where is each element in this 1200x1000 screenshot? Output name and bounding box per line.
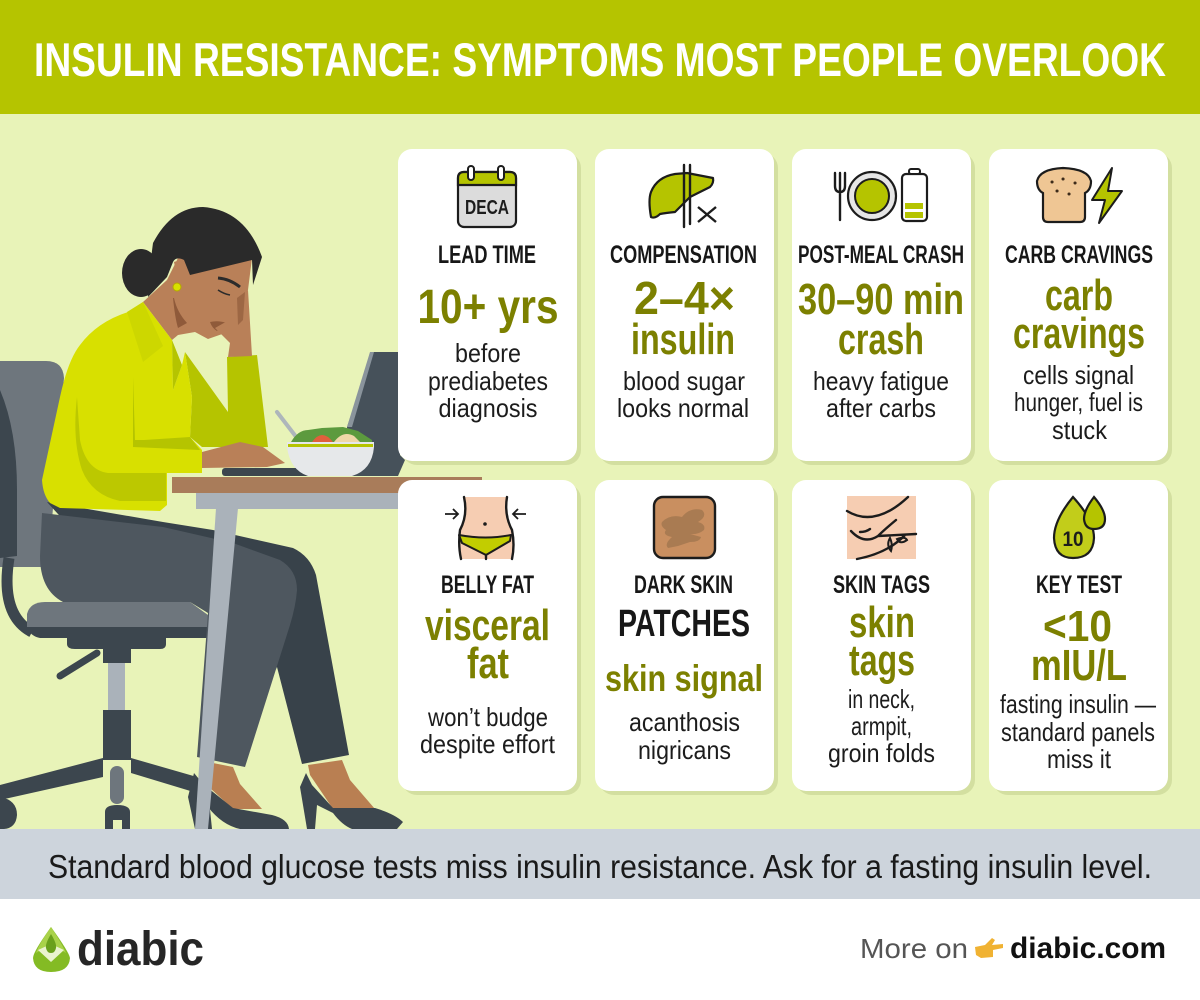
neck and face xyxy=(143,258,252,340)
panel: lead time xyxy=(398,149,581,465)
key figure: skin signal xyxy=(605,658,763,699)
key figure: fat xyxy=(467,639,509,688)
description: after carbs xyxy=(826,393,936,423)
description: cells signal xyxy=(1023,360,1134,390)
key figure xyxy=(798,275,964,364)
title banner xyxy=(0,0,1200,114)
panel: dark skin patches xyxy=(595,480,778,795)
key figure: <10 xyxy=(1043,602,1112,651)
key figure xyxy=(425,601,550,688)
key figure: skin xyxy=(849,598,915,647)
description: miss it xyxy=(1047,744,1112,774)
description: before xyxy=(455,338,521,368)
description: groin folds xyxy=(828,738,935,768)
key figure: visceral xyxy=(425,601,550,650)
laptop xyxy=(222,352,405,476)
panel: key test xyxy=(989,480,1172,795)
shirt folds and collar xyxy=(75,302,200,501)
chair xyxy=(0,361,208,829)
icon: drops with 10 xyxy=(1054,497,1105,558)
description: nigricans xyxy=(638,735,731,765)
key figure: crash xyxy=(838,315,924,364)
desk leg xyxy=(195,508,238,829)
salad bowl xyxy=(277,412,374,476)
raised arm sleeve xyxy=(185,352,268,447)
description xyxy=(828,684,935,768)
key figure: 30–90 min xyxy=(798,275,964,324)
heading: POST-MEAL CRASH xyxy=(798,241,964,269)
key figure: cravings xyxy=(1013,309,1145,358)
key figure: mIU/L xyxy=(1031,641,1127,690)
earring xyxy=(173,283,181,291)
description: armpit, xyxy=(851,711,912,741)
key figure xyxy=(631,272,735,364)
key figure: carb xyxy=(1045,271,1113,320)
panel: carb cravings xyxy=(989,149,1172,465)
logo wordmark: diabic xyxy=(77,923,204,976)
panel: skin tags xyxy=(792,480,975,795)
illustration: woman fatigued at desk xyxy=(0,207,482,829)
heading: SKIN TAGS xyxy=(833,571,930,599)
description: looks normal xyxy=(617,393,749,423)
icon: calendar xyxy=(458,166,516,227)
heading: LEAD TIME xyxy=(438,241,536,269)
key figure xyxy=(1031,602,1127,690)
desk xyxy=(172,477,482,509)
patches label: PATCHES xyxy=(618,603,750,645)
description: in neck, xyxy=(848,684,915,714)
description: fasting insulin — xyxy=(1000,689,1156,719)
description xyxy=(428,338,548,423)
callout strip xyxy=(0,829,1200,899)
description xyxy=(813,366,949,423)
description: standard panels xyxy=(1001,717,1155,747)
key figure: tags xyxy=(849,636,915,685)
icon: pointing hand xyxy=(975,938,1003,958)
description: despite effort xyxy=(420,729,556,759)
panel: post-meal crash xyxy=(792,149,975,465)
description xyxy=(1014,360,1143,445)
description: diagnosis xyxy=(438,393,538,423)
description: acanthosis xyxy=(629,707,740,737)
footer xyxy=(0,899,1200,1000)
icon: diabic logo drop xyxy=(33,927,70,972)
description xyxy=(420,702,556,759)
icon: waist xyxy=(445,497,526,559)
heading: BELLY FAT xyxy=(441,571,534,599)
icon: bread and lightning xyxy=(1037,168,1122,223)
panel: belly fat xyxy=(398,480,581,795)
icon: calendar: DECA xyxy=(465,197,509,219)
icon: plate and low battery xyxy=(835,169,927,221)
panel: compensation xyxy=(595,149,778,465)
description: blood sugar xyxy=(623,366,745,396)
shirt xyxy=(42,302,202,511)
description: hunger, fuel is xyxy=(1014,387,1143,417)
hair xyxy=(122,207,262,297)
typing hand xyxy=(202,442,285,468)
description xyxy=(629,707,740,765)
description: won’t budge xyxy=(427,702,548,732)
shoes and ankles xyxy=(188,760,403,829)
heading: COMPENSATION xyxy=(610,241,757,269)
description: stuck xyxy=(1052,415,1108,445)
icon: drops with 10: 10 xyxy=(1062,528,1084,551)
description xyxy=(617,366,749,423)
legs and trousers xyxy=(40,502,349,767)
description xyxy=(1000,689,1156,774)
more on link: More on xyxy=(860,933,968,964)
website: diabic.com xyxy=(1010,932,1166,965)
key figure xyxy=(849,598,915,685)
key figure: insulin xyxy=(631,315,735,364)
icon: liver xyxy=(650,165,716,227)
icon: skin folds with tags xyxy=(847,496,916,559)
key figure: 2–4× xyxy=(634,272,735,324)
hand on head xyxy=(215,290,252,357)
heading: DARK SKIN xyxy=(634,571,733,599)
key figure: 10+ yrs xyxy=(418,281,558,334)
description: heavy fatigue xyxy=(813,366,949,396)
description: prediabetes xyxy=(428,366,548,396)
icon: skin patch xyxy=(654,497,715,558)
key figure xyxy=(1013,271,1145,358)
heading: KEY TEST xyxy=(1036,571,1122,599)
